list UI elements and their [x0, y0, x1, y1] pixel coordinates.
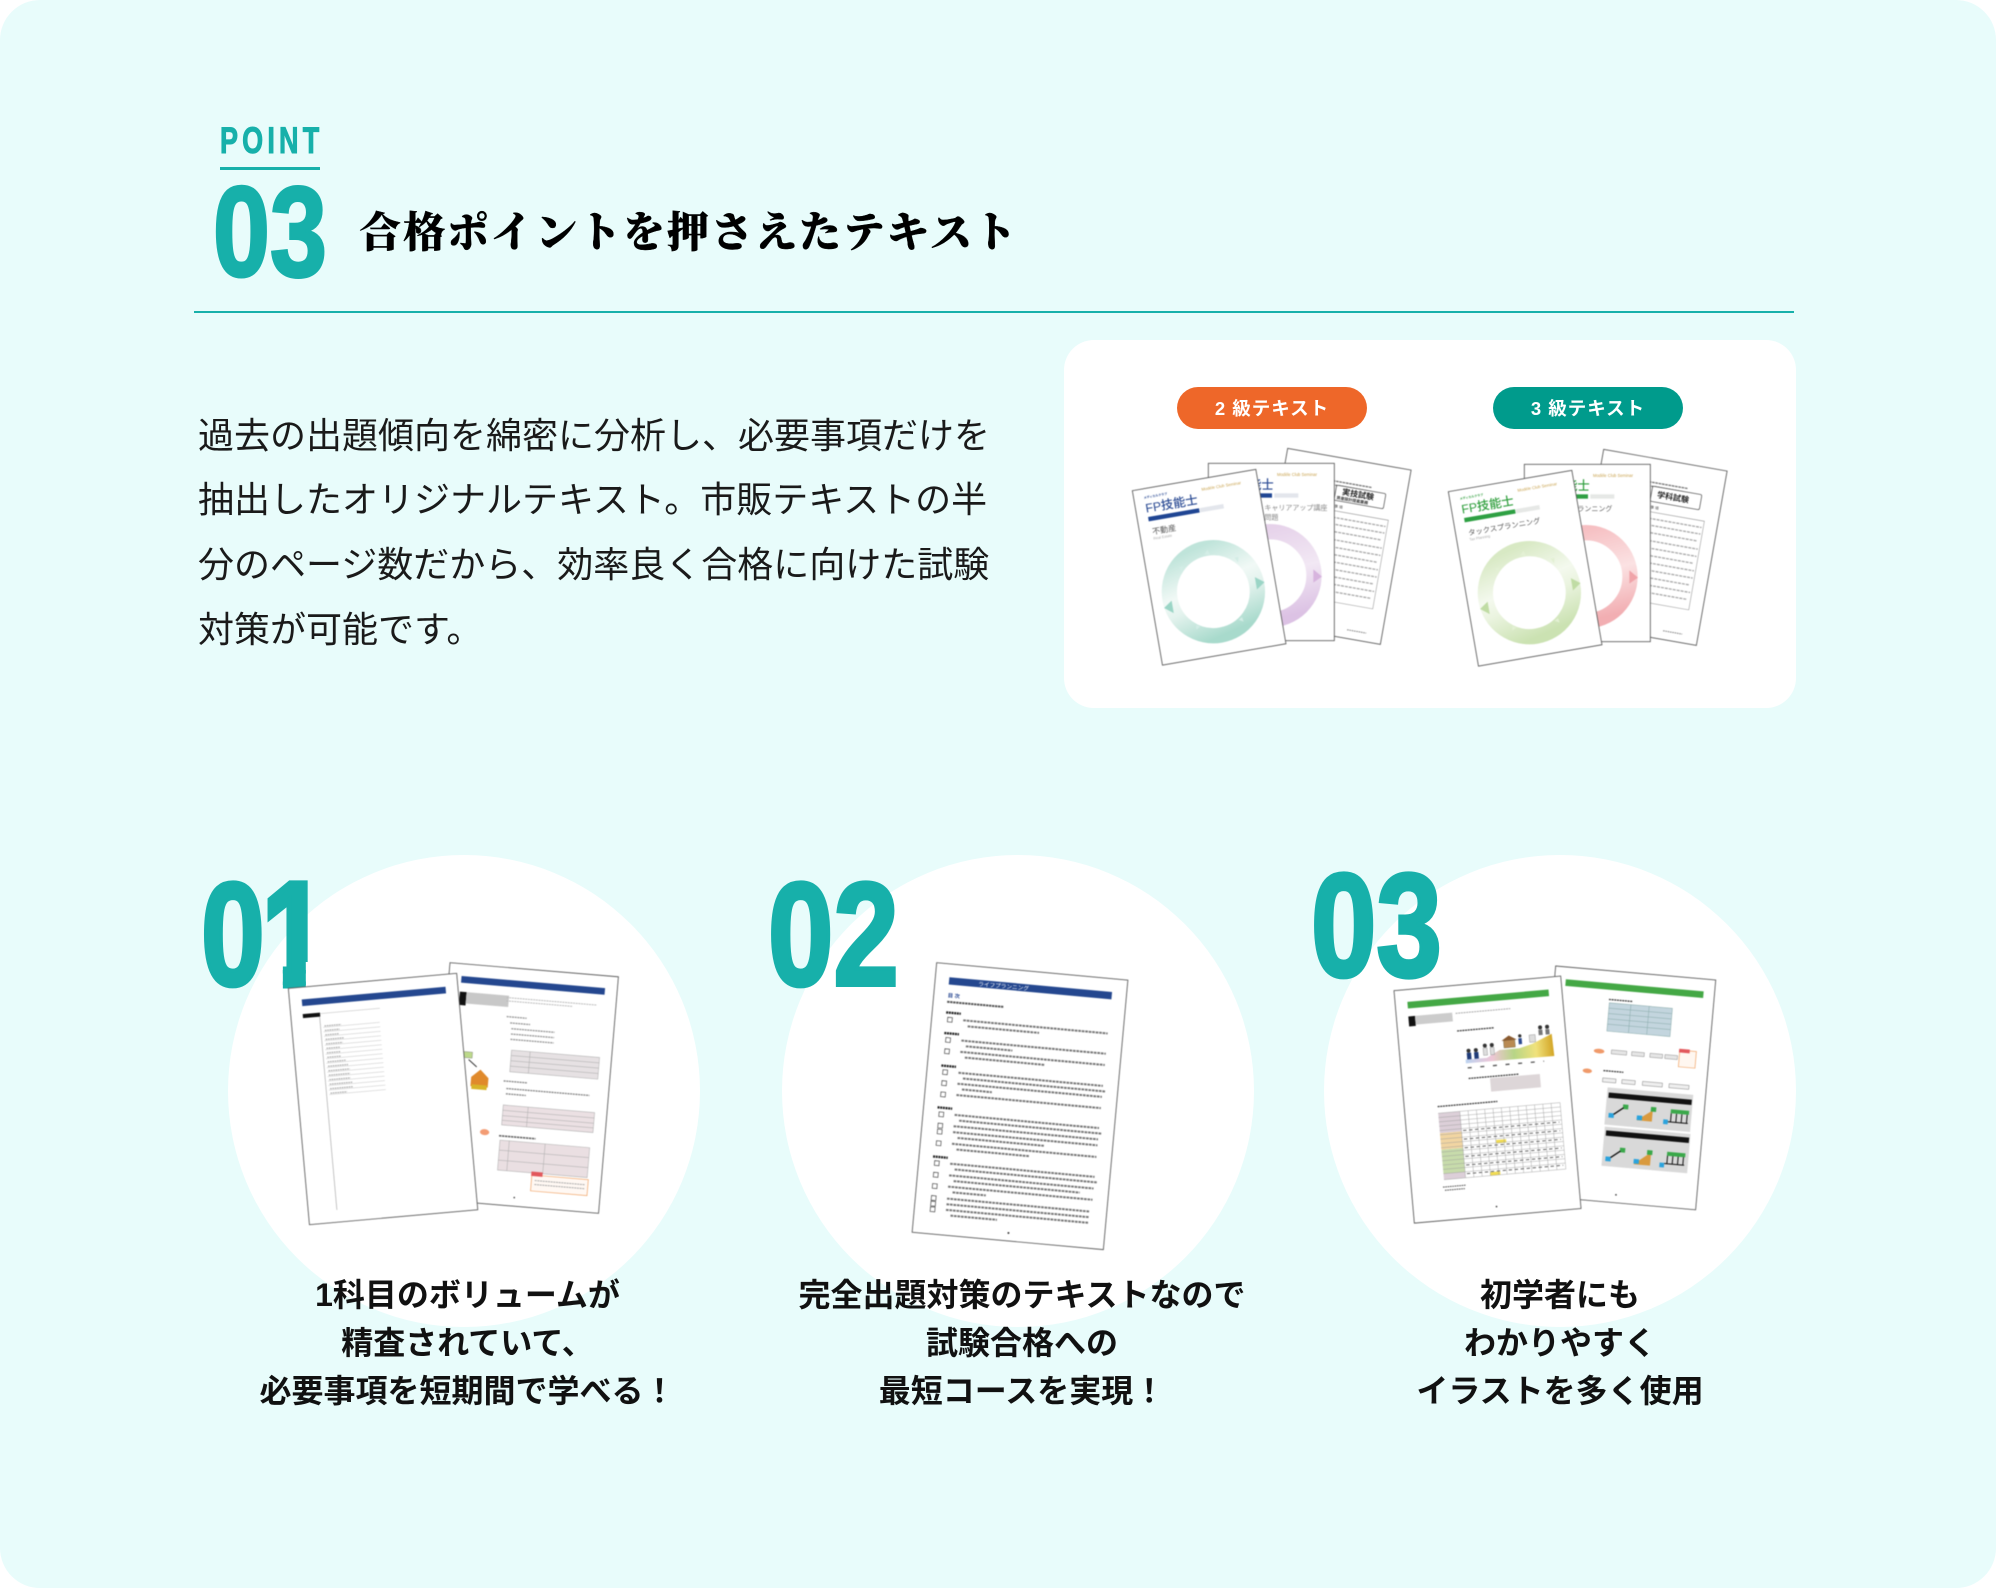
page: practice questions: 目 次: [947, 991, 961, 1000]
second-subject cover: 問題: [1264, 513, 1278, 521]
number 01: 0: [201, 853, 265, 1017]
front cover: tax planning: タックスプランニング: [1468, 516, 1542, 537]
page: practice questions: [912, 963, 1128, 1250]
second-subject cover: FP技能士: [1537, 478, 1590, 493]
illustration: grade 3 textbooks: [1447, 448, 1728, 668]
caption: point 2: 最短コースを実現！: [879, 1373, 1165, 1409]
intro text block: 対策が可能です。: [198, 609, 482, 650]
heading: number 03: 03: [213, 161, 327, 304]
badge: grade 3 textbook: [1493, 387, 1683, 429]
front cover: tax planning: Modèle Club Seminar: [1517, 481, 1558, 493]
illustration: point 1 sample pages: [287, 962, 620, 1226]
exam sheet: [1573, 449, 1727, 645]
front cover: tax planning: FP技能士: [1460, 493, 1515, 517]
circle: point 1 backdrop: [228, 855, 700, 1327]
caption: point 3: 初学者にも: [1480, 1277, 1640, 1313]
number 02: 02: [768, 853, 899, 1017]
page: practice questions: ライフプランニング: [978, 980, 1030, 992]
caption: point 3: わかりやすく: [1464, 1325, 1656, 1361]
page: real estate content: [430, 963, 618, 1213]
exam sheet: 注 意 事 項: [1641, 503, 1659, 511]
caption: point 3: イラストを多く使用: [1416, 1373, 1704, 1409]
front cover: real estate: [1132, 469, 1286, 665]
heading: title: 合格ポイントを押さえたテキスト: [359, 211, 1018, 257]
circle: point 3 backdrop: [1324, 855, 1796, 1327]
heading: POINT underline: [220, 167, 320, 170]
second-subject cover: Modèle Club Seminar: [1593, 473, 1634, 478]
caption: point 1: 精査されていて、: [341, 1325, 594, 1361]
front cover: tax planning: メディカルクラブ: [1459, 492, 1484, 501]
page: table of contents: [288, 973, 478, 1225]
badge: grade 2 textbook: [1177, 387, 1367, 429]
exam sheet: 資産設計提案業務: [1336, 494, 1369, 505]
caption: point 2: 試験合格への: [926, 1325, 1118, 1361]
illustration: point 2 sample page: [911, 962, 1129, 1251]
badge: grade 2 textbook: 2 級テキスト: [1215, 398, 1329, 419]
caption: point 1: [259, 1277, 676, 1409]
front cover: real estate: 不動産: [1151, 523, 1177, 536]
exam sheet: 学科試験: [1656, 489, 1690, 505]
caption: point 2: [798, 1277, 1246, 1409]
front cover: real estate: メディカルクラブ: [1143, 491, 1168, 500]
front cover: real estate: Real Estate: [1153, 534, 1172, 541]
illustration: point 3 sample pages: [1392, 964, 1717, 1224]
front cover: tax planning: [1448, 470, 1602, 666]
circle: point 2 backdrop: [782, 855, 1254, 1327]
exam sheet: 注 意 事 項: [1325, 502, 1343, 510]
page: life planning: [1394, 976, 1581, 1223]
badge: grade 3 textbook: 3 級テキスト: [1531, 398, 1645, 419]
second-subject cover: キャリアアップ講座: [1264, 503, 1327, 512]
heading: POINT label: POINT: [220, 119, 323, 161]
number 01: 1: [262, 853, 326, 1017]
caption: point 1: 1科目のボリュームが: [315, 1277, 620, 1313]
intro text block: [198, 414, 990, 650]
panel: textbook covers: [1064, 340, 1796, 708]
caption: point 1: 必要事項を短期間で学べる！: [259, 1373, 676, 1409]
heading rule: [194, 311, 1794, 313]
exam sheet: 実技試験: [1341, 487, 1375, 502]
second-subject cover: Modèle Club Seminar: [1277, 472, 1318, 477]
caption: point 3: [1416, 1277, 1704, 1409]
number 01: [201, 853, 308, 1017]
front cover: tax planning: Tax Planning: [1469, 534, 1490, 542]
intro text block: 過去の出題傾向を綿密に分析し、必要事項だけを: [198, 414, 990, 456]
caption: point 2: 完全出題対策のテキストなので: [798, 1277, 1246, 1313]
number 03: 03: [1311, 844, 1442, 1008]
intro text block: 抽出したオリジナルテキスト。市販テキストの半: [198, 479, 987, 520]
second-subject cover: FP技能士: [1221, 477, 1274, 492]
exam sheet: [1257, 448, 1411, 644]
second-subject cover: ライフプランニング: [1549, 504, 1612, 513]
page: insurance diagrams: [1536, 966, 1716, 1210]
second-subject cover: [1524, 464, 1650, 642]
illustration: grade 2 textbooks: [1131, 447, 1412, 666]
front cover: real estate: FP技能士: [1144, 492, 1199, 516]
front cover: real estate: Modèle Club Seminar: [1201, 480, 1242, 492]
second-subject cover: [1208, 463, 1334, 641]
intro text block: 分のページ数だから、効率良く合格に向けた試験: [198, 544, 989, 585]
